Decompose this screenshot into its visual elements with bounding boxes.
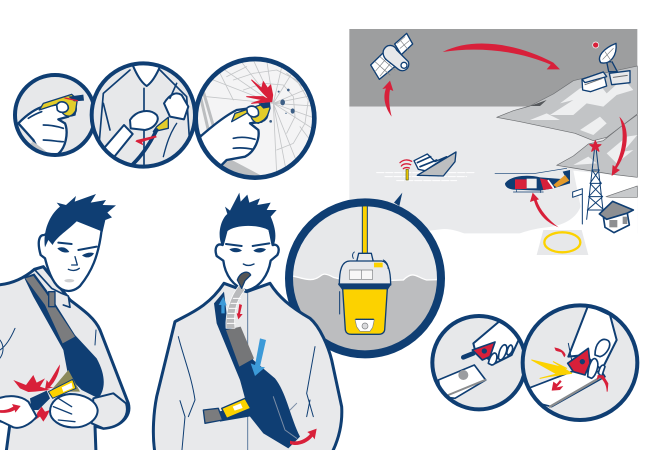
left hand bbox=[0, 396, 37, 428]
far hill bbox=[606, 186, 637, 197]
zip bbox=[246, 293, 249, 450]
grey strap bbox=[25, 276, 75, 343]
oral inflation tube bbox=[226, 272, 251, 328]
icon: house bbox=[599, 201, 633, 233]
jacket fold lines bbox=[178, 337, 315, 450]
lifejacket bag bbox=[24, 273, 104, 398]
icon: helicopter bbox=[495, 168, 570, 193]
sea bbox=[349, 107, 637, 233]
step 1 circle bbox=[15, 75, 95, 163]
red arrow bbox=[290, 429, 317, 445]
icon: radio tower bbox=[587, 141, 604, 219]
red arrow bbox=[45, 364, 60, 389]
arrow: beacon to satellite bbox=[382, 81, 393, 117]
icon: satellite dish and station bbox=[582, 42, 630, 92]
red arrow left bbox=[0, 404, 21, 413]
icon: satellite bbox=[371, 33, 413, 79]
panel: window punch steps bbox=[15, 58, 323, 183]
beacon bbox=[339, 252, 391, 334]
arrow: satellite to ground station bbox=[443, 44, 560, 69]
sky bbox=[349, 29, 637, 107]
buckle and yellow inflator bbox=[203, 398, 251, 423]
strap buckle bbox=[49, 292, 55, 307]
panel: rescue chain scene bbox=[349, 29, 637, 255]
panel: person inflating lifejacket bbox=[153, 193, 342, 450]
icon: helipad bbox=[537, 230, 588, 255]
head bbox=[39, 194, 116, 291]
icon: flag pole bbox=[573, 189, 582, 224]
shoreline white ground bbox=[349, 171, 637, 240]
inflation lines on bag bbox=[273, 397, 297, 438]
blue arrow up bbox=[219, 297, 227, 313]
panel: water-activated beacon circle bbox=[283, 193, 450, 363]
circle background bbox=[289, 202, 441, 354]
red impact bursts bbox=[13, 375, 50, 422]
circle border with pointer bbox=[289, 193, 441, 354]
panel: person activating inflator bbox=[0, 194, 129, 450]
step 3 circle: breaking window bbox=[190, 59, 323, 183]
collar and zip bbox=[34, 269, 70, 307]
head bbox=[216, 193, 279, 291]
beacon lanyard bbox=[362, 205, 367, 254]
blue arrow large bbox=[251, 338, 266, 376]
red arrows bbox=[552, 347, 608, 392]
sleeve bbox=[92, 393, 127, 428]
step 1 circle bbox=[432, 316, 526, 409]
chest strap bbox=[218, 403, 258, 422]
step 2 circle bbox=[523, 305, 637, 420]
upper mountain bbox=[497, 66, 637, 141]
finger lines bbox=[53, 398, 75, 422]
right hand bbox=[50, 394, 98, 427]
red arrow down bbox=[237, 304, 243, 319]
step 2 circle bbox=[92, 58, 195, 173]
arrow: station to tower bbox=[612, 117, 627, 176]
panel: flare steps bbox=[432, 305, 637, 420]
grey strap section bbox=[226, 327, 254, 367]
icon: sinking boat with beacon bbox=[377, 152, 475, 181]
lifejacket strap and bag bbox=[214, 292, 300, 448]
yellow inflator bbox=[30, 370, 80, 410]
arrow: helipad to helicopter bbox=[530, 193, 559, 227]
jacket fold lines bbox=[0, 328, 96, 360]
jacket bbox=[0, 267, 129, 450]
water bbox=[293, 274, 437, 350]
jacket bbox=[153, 283, 342, 450]
lower mountain bbox=[557, 115, 637, 177]
